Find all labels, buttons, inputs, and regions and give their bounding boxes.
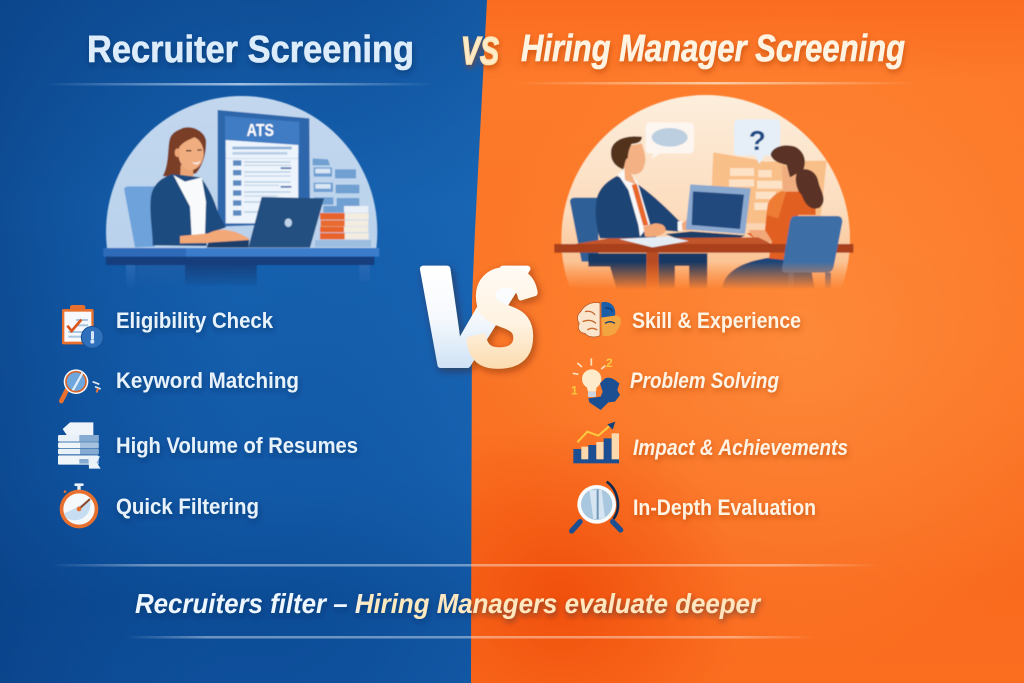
chair bbox=[124, 186, 155, 247]
label: Skill & Experience bbox=[632, 308, 801, 333]
list: recruiter criteria bbox=[58, 305, 358, 528]
divider: left heading rule bbox=[45, 83, 435, 86]
panel: hiring manager orange background bbox=[471, 0, 1024, 683]
icon: brain bbox=[577, 302, 621, 337]
icon: stack of resumes bbox=[58, 422, 101, 469]
item: Skill & Experience bbox=[577, 302, 801, 337]
item: Impact & Achievements bbox=[573, 422, 848, 463]
ATS board: ATS bbox=[247, 120, 274, 140]
icon: stopwatch bbox=[60, 483, 98, 528]
candidate bbox=[722, 145, 824, 290]
divider: footer top rule bbox=[50, 564, 880, 566]
candidate chair bbox=[782, 216, 842, 290]
laptop bbox=[207, 197, 324, 248]
laptop bbox=[666, 184, 751, 241]
woman bbox=[150, 127, 249, 246]
footer takeaway: Recruiters filter – Hiring Managers evaluate deeper bbox=[135, 588, 762, 619]
letter V: V bbox=[410, 238, 528, 395]
label: Impact & Achievements bbox=[633, 435, 848, 460]
letter S: S bbox=[468, 244, 536, 393]
speech bubble: manager bbox=[646, 122, 694, 159]
book stack bbox=[315, 206, 371, 247]
label: Eligibility Check bbox=[116, 308, 274, 333]
manager bbox=[596, 136, 702, 238]
illustration: hiring manager interview at table bbox=[554, 94, 854, 288]
manager legs bbox=[588, 253, 707, 290]
desk bbox=[103, 248, 379, 288]
speech bubble: question mark bbox=[734, 119, 780, 164]
manager chair bbox=[570, 198, 598, 262]
icon: large magnifying glass bbox=[572, 482, 621, 531]
label: Quick Filtering bbox=[116, 494, 259, 519]
heading: Hiring Manager Screening: Hiring Manager Screening bbox=[521, 28, 905, 70]
divider: footer bottom rule bbox=[125, 636, 815, 638]
item: Eligibility Check bbox=[62, 305, 274, 348]
heading: Recruiter Screening: Recruiter Screening bbox=[87, 29, 414, 71]
list: hiring manager criteria bbox=[571, 302, 848, 531]
label: Keyword Matching bbox=[116, 368, 299, 393]
icon: clipboard with badge bbox=[62, 305, 103, 348]
label: In-Depth Evaluation bbox=[633, 495, 816, 520]
large center VS badge bbox=[410, 238, 536, 395]
item: In-Depth Evaluation bbox=[572, 482, 816, 531]
icon: magnifying glass bbox=[61, 369, 101, 401]
illustration: recruiter at desk with ATS screen bbox=[103, 95, 380, 285]
item: Keyword Matching bbox=[61, 368, 299, 401]
divider: right heading rule bbox=[515, 82, 915, 84]
ATS board bbox=[218, 110, 310, 227]
icon: growth bar chart bbox=[573, 422, 619, 463]
background document bbox=[710, 152, 827, 223]
label: High Volume of Resumes bbox=[116, 433, 358, 458]
item: Problem Solving bbox=[571, 356, 779, 410]
item: Quick Filtering bbox=[60, 483, 259, 528]
icon: lightbulb and puzzle piece: 2 bbox=[606, 356, 613, 370]
speech bubble: question mark: ? bbox=[749, 125, 766, 156]
dome background bbox=[560, 94, 851, 286]
table bbox=[554, 236, 853, 290]
panel: recruiter blue background bbox=[0, 0, 490, 683]
item: High Volume of Resumes bbox=[58, 422, 358, 469]
dome background bbox=[105, 95, 378, 249]
side cards bbox=[313, 158, 359, 206]
icon: lightbulb and puzzle piece bbox=[571, 356, 620, 410]
icon: lightbulb and puzzle piece: 1 bbox=[571, 383, 578, 397]
heading: small VS: VS bbox=[461, 30, 499, 73]
label: Problem Solving bbox=[630, 368, 779, 393]
